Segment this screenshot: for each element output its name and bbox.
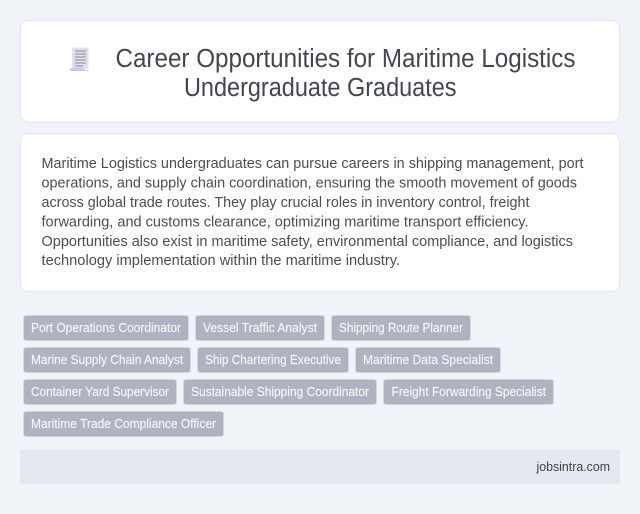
tag: Ship Chartering Executive — [205, 352, 341, 367]
tag: Vessel Traffic Analyst — [203, 320, 317, 335]
tag — [332, 316, 470, 340]
tag — [24, 412, 224, 436]
tag: Freight Forwarding Specialist — [392, 384, 546, 399]
tag: Sustainable Shipping Coordinator — [191, 384, 370, 399]
title: Undergraduate Graduates — [184, 74, 456, 102]
tag list: career roles — [24, 316, 554, 436]
tag: Marine Supply Chain Analyst — [31, 352, 183, 367]
tag: Port Operations Coordinator — [31, 320, 182, 335]
tag: Container Yard Supervisor — [31, 384, 170, 399]
footer bar — [20, 450, 620, 484]
text block: description: across global trade routes. They play crucial roles in inventory control, freight — [42, 194, 530, 211]
tag — [24, 380, 176, 404]
tag — [24, 316, 188, 340]
text block: description — [42, 155, 584, 269]
tag: Maritime Data Specialist — [363, 352, 493, 367]
title — [116, 45, 576, 102]
tag — [24, 348, 190, 372]
panel: description — [20, 134, 620, 292]
tag — [198, 348, 348, 372]
text block: description: operations, and supply chain coordination, ensuring the smooth movement of goods — [42, 174, 577, 192]
tag — [356, 348, 500, 372]
text block: description: Opportunities also exist in maritime safety, environmental compliance, and logistics — [42, 233, 573, 250]
text block: description: Maritime Logistics undergraduates can pursue careers in shipping management, port — [42, 155, 584, 172]
tag: Maritime Trade Compliance Officer — [31, 416, 217, 431]
tag — [384, 380, 554, 404]
text block: description: technology implementation within the maritime industry. — [42, 252, 400, 269]
icon: paper scroll document — [70, 48, 88, 71]
panel: header — [20, 20, 620, 122]
tag — [184, 380, 376, 404]
footer text: jobsintra.com — [536, 459, 610, 474]
tag — [196, 316, 324, 340]
text block: description: forwarding, and customs clearance, optimizing maritime transport efficiency. — [42, 214, 528, 230]
title: Career Opportunities for Maritime Logistics — [116, 45, 576, 73]
tag: Shipping Route Planner — [339, 320, 464, 335]
